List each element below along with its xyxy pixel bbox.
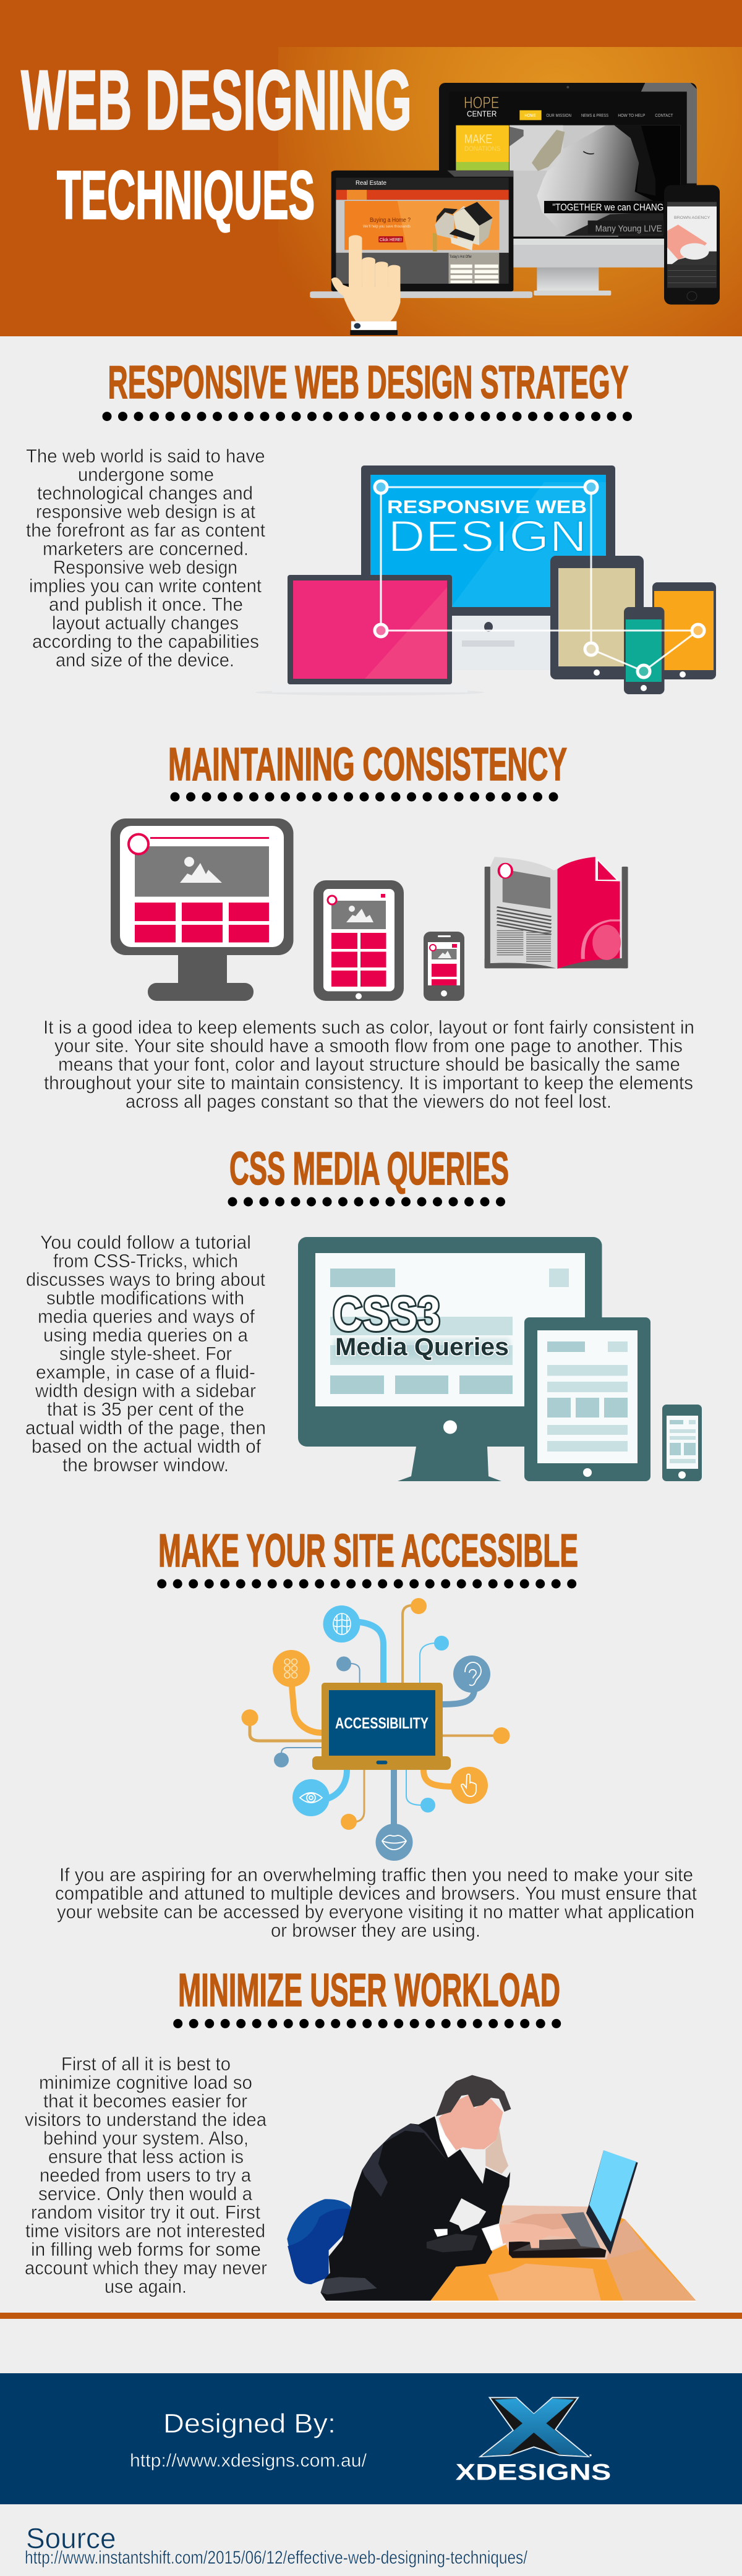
title [21,53,412,234]
device: desktop monitor [439,83,697,295]
typing hand and cuffs [434,2214,576,2250]
panel: make your site accessible [55,1524,697,1941]
icon: pointing hand [331,235,400,335]
text block: If you are aspiring for an overwhelming traffic then you need to make your site [59,1864,693,1885]
illustration: phone [424,932,464,1001]
label glow [334,1339,510,1358]
text block: responsive web design is at [36,501,255,522]
device shadows [255,689,484,695]
laptop labels: Click HERE! [380,238,402,242]
text block: or browser they are using. [271,1919,480,1941]
dotted divider [107,412,628,421]
icon: eye [292,1779,330,1816]
heading: CSS MEDIA QUERIES [229,1142,509,1194]
title line: web designing: WEB DESIGNING [21,53,412,148]
monitor labels: HOPE [464,93,499,112]
text block: and publish it once. The [49,593,243,615]
panel: css media queries [25,1142,702,1481]
panel: source [25,2522,528,2568]
monitor labels: CENTER [467,110,497,119]
designed by label: Designed By: [163,2408,336,2439]
laptop labels [356,180,472,259]
dotted divider [232,1197,501,1207]
source url: http://www.instantshift.com/2015/06/12/effective-web-designing-techniques/ [25,2548,528,2568]
text block: Responsive web design [53,556,237,578]
monitor labels: NEWS & PRESS [581,113,608,118]
text block: ensure that less action is [48,2146,244,2167]
text block: implies you can write content [29,575,262,597]
monitor labels: HOME [524,113,536,118]
icon: touch hand [451,1767,488,1804]
text block: width design with a sidebar [35,1380,256,1401]
panel: maintaining consistency [43,738,694,1112]
text block: from CSS-Tricks, which [53,1250,238,1272]
device: phone [624,607,664,694]
label: accessibility: ACCESSIBILITY [335,1715,429,1732]
text block: It is a good idea to keep elements such as color, layout or font fairly consistent in [43,1016,694,1038]
banner orange glow [278,47,742,336]
monitor labels: CONTACT [655,113,673,118]
text block: media queries and ways of [38,1306,255,1327]
text block: example, in case of a fluid- [36,1361,255,1383]
illustration: tablet [313,880,404,1001]
device: monitor [361,465,615,670]
connector lines [250,1605,495,1827]
device: small tablet [652,582,716,679]
text block: single style-sheet. For [59,1343,232,1364]
device: large tablet [550,556,644,679]
text block: discusses ways to bring about [26,1269,265,1290]
text block: that is 35 per cent of the [47,1398,244,1420]
monitor labels: MAKE [464,133,492,147]
label: media queries: Media Queries [335,1333,509,1361]
text block [43,1016,694,1112]
dotted divider [162,1579,573,1589]
source heading: Source [26,2522,116,2554]
icon: brain [323,1605,360,1643]
text block: technological changes and [37,482,253,504]
laptop labels: Today's Hot Offer [450,255,472,259]
illustration: responsive devices [255,465,716,695]
icon: lips [376,1824,413,1861]
panel: minimize user workload [25,1964,696,2302]
text block: throughout your site to maintain consistency. It is important to keep the elements [44,1072,693,1094]
text block: using media queries on a [43,1324,249,1346]
text block: marketers are concerned. [43,538,249,559]
phone label: BROWN AGENCY [674,216,710,220]
text block: undergone some [78,464,214,485]
text block: according to the capabilities [32,631,259,652]
text block: behind your system. Also, [43,2127,249,2149]
laptop labels: We'll help you save thousands [363,225,411,229]
text block: First of all it is best to [61,2053,231,2075]
device: laptop [272,575,467,692]
text block: visitors to understand the idea [25,2109,267,2130]
arm on cheek [485,2127,508,2174]
text block: your site. Your site should have a smooth flow from one page to another. This [54,1035,683,1056]
text block: time visitors are not interested [25,2220,265,2242]
connector network [375,481,704,678]
text block: and size of the device. [56,649,234,671]
text block: needed from users to try a [40,2164,252,2186]
footer rule [0,2313,742,2319]
navy band [0,2373,742,2504]
text block: across all pages constant so that the viewers do not feel lost. [126,1090,612,1112]
chair [287,2199,351,2284]
device: phone [664,185,720,305]
laptop labels: Buying a Home ? [370,217,411,224]
illustration: desktop [111,818,293,1001]
laptop: house picture [433,202,493,252]
laptop: accessibility [312,1683,451,1770]
text block: minimize cognitive load so [39,2072,252,2093]
text block: compatible and attuned to multiple devices and browsers. You must ensure that [55,1882,697,1904]
text block: You could follow a tutorial [40,1231,251,1253]
monitor labels: DONATIONS [464,145,500,153]
illustration: magazine [485,857,628,969]
desk [326,2205,696,2302]
monitor labels: Many Young LIVE [595,224,662,234]
text block: the browser window. [62,1454,229,1476]
label: css3: CSS3 [333,1286,440,1341]
text block: The web world is said to have [26,445,265,467]
laptop labels: Real Estate [356,180,386,187]
panel: header banner [0,0,742,336]
small nodes [241,1598,510,1830]
text block: in filling web forms for some [31,2238,261,2260]
logo wordmark: XDESIGNS [456,2459,611,2485]
text block: based on the actual width of [32,1435,261,1457]
text block: subtle modifications with [46,1287,244,1309]
icon: ear [453,1656,490,1693]
suit [321,2116,510,2301]
text block: the forefront as far as content [26,519,265,541]
text block: your website can be accessed by everyone visiting it no matter what application [57,1901,694,1923]
label: responsive web: RESPONSIVE WEB [387,497,587,517]
banner background [0,0,742,336]
title line: techniques: TECHNIQUES [57,158,315,234]
illustration: tablet [524,1317,650,1481]
icon: keypad [273,1650,310,1687]
logo: xdesigns [456,2397,611,2485]
text block: account which they may never [25,2257,267,2279]
panel: designed by [0,2373,742,2504]
illustration: accessibility network [241,1598,510,1861]
dotted divider [178,2019,557,2028]
monitor labels: OUR MISSION [546,113,571,118]
illustration: devices [310,83,720,335]
text block: service. Only then would a [38,2183,253,2204]
illustration: monitor [298,1237,602,1481]
text block: use again. [104,2276,187,2297]
text block [25,1231,266,1476]
dotted divider [175,793,554,801]
label: design: DESIGN [388,512,587,561]
text block: means that your font, color and layout structure should be basically the same [58,1053,680,1075]
designer url: http://www.xdesigns.com.au/ [130,2451,367,2471]
text block: random visitor try it out. First [31,2201,260,2223]
monitor labels: HOW TO HELP [618,113,645,118]
illustration: phone [662,1405,702,1481]
laptop [509,2150,638,2258]
illustration: man at laptop [287,2075,696,2302]
text block [26,445,265,671]
device: laptop [310,171,532,298]
text block [25,2053,267,2297]
text block [55,1864,697,1941]
text block: layout actually changes [52,612,239,634]
text block: that it becomes easier for [43,2090,247,2112]
head and neck [436,2075,511,2150]
shirt [435,2116,456,2157]
monitor labels: "TOGETHER we can CHANG [552,203,663,213]
monitor labels [464,93,673,234]
panel: responsive web design strategy [26,356,716,695]
text block: actual width of the page, then [25,1417,266,1439]
